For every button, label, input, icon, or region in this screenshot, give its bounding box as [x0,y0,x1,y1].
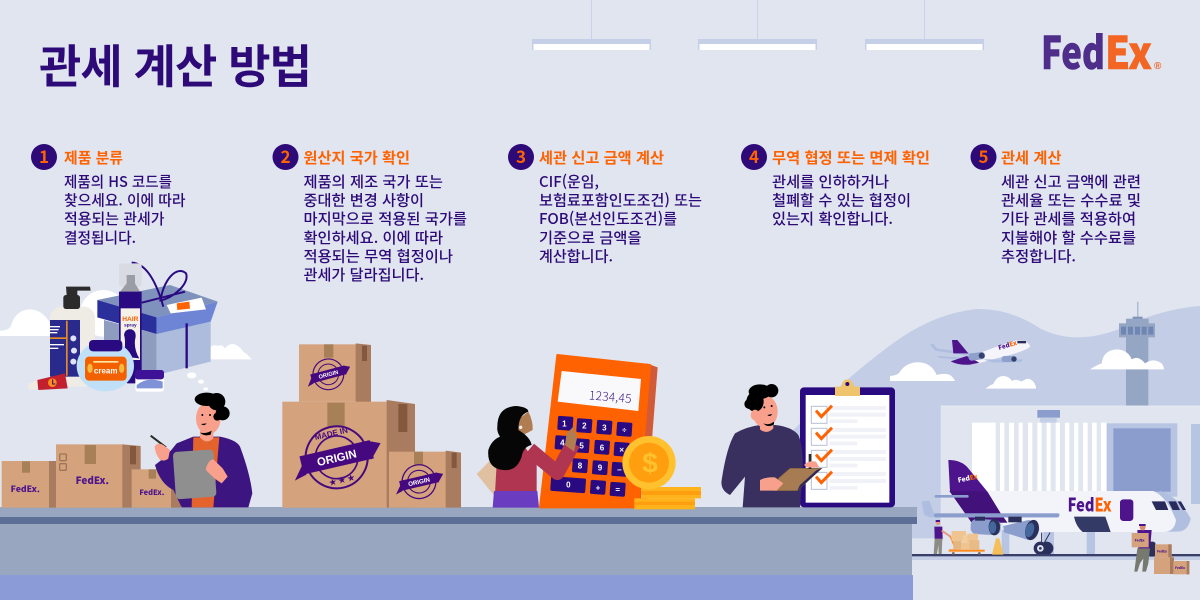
step 2: 원산지 국가 확인 [304,147,410,168]
step 2: 중대한 변경 사항이 [304,190,424,210]
step 1: 적용되는 관세가 [64,208,165,229]
calculator: 3 [602,423,607,432]
worker with boxes [1132,524,1189,574]
flying plane: FedEx [997,338,1018,352]
illustration: country of origin boxes [282,343,701,509]
hills [790,306,1200,560]
cream jar: cream [94,367,117,376]
step 5: 관세율 또는 수수료 및 [1001,190,1141,210]
step 5: 추정합니다. [1001,246,1076,266]
step 2 [272,143,467,285]
step 4 [741,143,930,229]
worker with boxes: FedEx [1175,565,1185,570]
calculator: × [619,445,624,454]
thought bubbles [187,372,208,391]
step 2: 관세가 달라집니다. [304,264,424,285]
title: 관세 계산 방법 [39,31,312,97]
calculator: 8 [578,462,583,471]
airport scene background [790,302,1200,574]
cardboard boxes [2,444,181,508]
step 1: 제품의 HS 코드를 [64,171,172,192]
stamp: ★ ★ ★ [328,473,356,488]
worker with boxes: FedEx [1135,537,1145,542]
step 4: 관세를 인하하거나 [772,171,889,192]
step 2: 확인하세요. 이에 따라 [304,227,443,248]
coins [622,436,701,509]
hair spray can: HAIR [122,316,139,323]
step 3 [508,143,702,266]
pump bottle [50,287,95,387]
step 3: 기준으로 금액을 [539,227,642,248]
woman [477,406,577,508]
step 3: 보험료포함인도조건) 또는 [539,190,702,210]
small jar [135,370,164,392]
calculator [540,355,658,507]
worker with cart [934,520,985,555]
calculator: 1234,45 [588,386,632,407]
calculator: − [617,465,622,474]
FedEx logo [1041,17,1162,82]
top box [299,343,371,402]
step 3: FOB(본선인도조건)를 [539,208,677,229]
step 5 [970,143,1141,266]
big plane [922,460,1191,555]
hair spray can [119,263,142,383]
step 1: 결정됩니다. [64,227,136,248]
hair spray can: spray [124,323,137,328]
calculator: ÷ [622,425,627,434]
step 4: 있는지 확인합니다. [772,208,893,229]
man with clipboard [721,384,822,507]
flying plane [930,338,1030,365]
gift box [97,263,218,375]
step 5: 세관 신고 금액에 관련 [1001,171,1141,192]
left hill foot [912,538,942,555]
clouds behind products [0,290,252,359]
ceiling lamps [532,0,984,50]
step 2: 2 [280,143,291,168]
cardboard boxes: FedEx. [76,472,109,487]
coins: $ [642,448,658,479]
calculator: + [596,483,601,492]
man with tablet [151,393,252,507]
step 3: 세관 신고 금액 계산 [539,147,664,168]
control tower [1119,302,1155,406]
stamp: MADE IN [314,426,349,442]
step 1 [31,143,186,248]
clouds [890,349,1164,389]
illustration: checklist [721,379,895,507]
calculator: 6 [600,443,605,452]
calculator: 1 [562,419,567,428]
big plane: FedEx [957,471,978,485]
terminal building [941,406,1200,556]
large box [282,400,415,508]
step 4: 무역 협정 또는 면제 확인 [772,147,930,168]
stamp: ORIGIN [408,476,431,488]
illustration: product classification [0,263,252,508]
step 1: 찾으세요. 이에 따라 [64,190,186,210]
clipboard [800,379,895,507]
cardboard boxes: FedEx. [139,487,165,498]
stamp: ORIGIN [316,448,358,469]
cardboard boxes: FedEx. [11,483,40,495]
tube [28,373,68,390]
calculator: 5 [579,442,584,451]
step 1: 제품 분류 [64,147,123,168]
step 5: 관세 계산 [1001,147,1062,168]
calculator: 0 [566,480,571,489]
step 2: 제품의 제조 국가 또는 [304,171,443,192]
step 5: 지불해야 할 수수료를 [1001,227,1136,248]
step 2: 적용되는 무역 협정이나 [304,246,453,266]
calculator: = [615,485,620,494]
FedEx logo: Ex [1105,17,1152,82]
step 5: 5 [978,143,989,168]
worker with boxes: FedEx [1157,549,1167,554]
cream jar [77,340,134,391]
step 4: 철폐할 수 있는 협정이 [772,190,911,210]
big plane: FedEx [1068,490,1112,517]
step 5: 기타 관세를 적용하여 [1001,208,1136,229]
calculator: 9 [598,464,603,473]
step 4: 4 [749,143,759,168]
calculator: 2 [582,422,587,431]
ground line [912,554,1200,556]
traffic cone [992,538,1003,555]
small box [389,451,461,508]
step 3: CIF(운임, [539,171,599,192]
step 3: 계산합니다. [539,246,613,266]
step 3: 3 [516,143,526,168]
FedEx logo: ® [1154,61,1162,72]
calculator: 4 [560,439,565,448]
stamp: ORIGIN [318,370,339,381]
counter [0,507,917,600]
stamp [285,417,388,498]
step 2: 마지막으로 적용된 국가를 [304,208,467,229]
step 1: 1 [39,143,49,168]
FedEx logo: Fed [1041,17,1105,82]
